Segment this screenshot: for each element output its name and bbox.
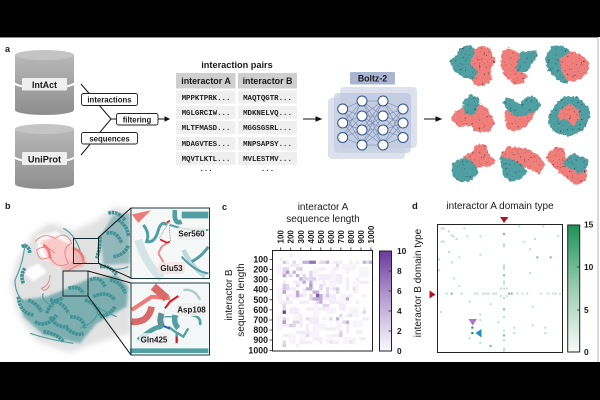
structure 1 — [452, 47, 493, 83]
label: Ser560: Ser560 — [178, 230, 205, 238]
interaction pairs table: interactor A — [181, 76, 231, 86]
Boltz-2 neural network — [328, 72, 417, 159]
inset: Asp108 Gln425 — [130, 283, 210, 355]
arrow to Boltz-2 — [303, 117, 321, 121]
label: Glu53: Glu53 — [160, 264, 183, 273]
structure 9 — [548, 149, 587, 183]
heatmap y-axis labels: 400 — [253, 285, 268, 295]
heatmap x-axis labels: 300 — [297, 230, 306, 244]
marker: red top — [500, 217, 508, 223]
domain map title: interactor A domain type — [446, 201, 554, 212]
structure 2 — [503, 50, 535, 82]
heatmap y-axis labels: 1000 — [248, 346, 268, 356]
arrow to table — [158, 117, 169, 121]
label: Asp108: Asp108 — [177, 306, 206, 314]
heatmap x-axis labels: 1000 — [367, 225, 376, 244]
heatmap x-axis labels: 100 — [277, 230, 286, 244]
label: sequences — [82, 132, 138, 144]
heatmap title — [286, 202, 360, 225]
structure 6 — [550, 99, 588, 134]
interaction pairs table: MQVTLKTL... — [182, 156, 230, 164]
heatmap colorbar: 4 — [397, 306, 402, 316]
heatmap colorbar: 6 — [397, 286, 402, 296]
domain colorbar: 10 — [584, 262, 594, 272]
heatmap x-axis labels: 700 — [337, 230, 346, 244]
label: filtering — [116, 114, 158, 125]
structure 3 — [547, 47, 587, 82]
heatmap y-axis labels: 100 — [253, 254, 268, 264]
interaction pairs table: MDKNELVQ... — [243, 110, 292, 118]
panel c label: c — [222, 202, 227, 212]
domain colorbar: 0 — [584, 347, 589, 357]
heatmap colorbar: 0 — [397, 346, 402, 356]
interaction pairs table — [176, 60, 297, 174]
heatmap y-axis labels: 300 — [253, 275, 268, 285]
connector lines — [81, 84, 117, 155]
molecular surface — [11, 207, 132, 353]
panel a label: a — [5, 44, 11, 54]
heatmap x-axis labels: 400 — [307, 230, 316, 244]
heatmap y-axis title — [224, 263, 247, 337]
interaction pairs table: MDAGVTES... — [182, 141, 230, 149]
structure 4 — [453, 97, 493, 130]
heatmap colorbar: 2 — [397, 326, 402, 336]
interaction pairs table: ... — [261, 166, 274, 174]
predicted complex structures — [452, 47, 588, 183]
database: UniProt: UniProt — [28, 154, 61, 164]
heatmap: domain type — [438, 224, 562, 352]
heatmap: sequence length — [270, 248, 372, 351]
table title: interaction pairs — [201, 60, 273, 70]
database: UniProt — [15, 124, 74, 189]
heatmap y-axis labels: 900 — [253, 335, 268, 345]
heatmap y-axis labels: 200 — [253, 264, 268, 274]
zoom box 1 — [74, 238, 98, 264]
heatmap y-axis title: sequence length — [236, 263, 247, 337]
heatmap title: sequence length — [286, 214, 360, 225]
protein complex cartoon — [11, 207, 132, 353]
domain colorbar: 15 — [584, 220, 594, 230]
label: interactions — [82, 94, 138, 106]
marker: red left — [430, 290, 436, 298]
heatmap x-axis labels: 500 — [317, 230, 326, 244]
marker: purple — [468, 319, 477, 326]
interaction pairs table: interactor B — [243, 76, 292, 86]
heatmap y-axis title: interactor B — [224, 269, 235, 321]
interaction pairs table: MPPKTPRK... — [182, 95, 230, 103]
heatmap y-axis labels: 800 — [253, 325, 268, 335]
inset: Ser560 Glu53 — [131, 208, 210, 278]
heatmap x-axis labels: 900 — [357, 230, 366, 244]
label: interactions: interactions — [87, 96, 132, 104]
panel b label: b — [5, 201, 11, 211]
structure 7 — [454, 147, 493, 180]
heatmap x-axis labels: 600 — [327, 230, 336, 244]
heatmap colorbar — [380, 246, 407, 356]
heatmap colorbar: 8 — [397, 266, 402, 276]
label: Gln425: Gln425 — [141, 336, 168, 344]
marker: blue — [476, 329, 482, 338]
structure 8 — [502, 149, 543, 180]
coral chain — [35, 235, 87, 290]
heatmap y-axis labels: 600 — [253, 305, 268, 315]
heatmap x-axis labels: 800 — [347, 230, 356, 244]
domain colorbar — [568, 220, 594, 357]
zoom lines — [88, 208, 131, 355]
heatmap x-axis labels: 200 — [287, 230, 296, 244]
domain colorbar: 5 — [584, 305, 589, 315]
panel d label: d — [412, 201, 418, 212]
structure 5 — [504, 99, 539, 130]
interaction pairs table: MVLESTMV... — [243, 156, 292, 164]
domain map y-axis title: interactor B domain type — [413, 228, 424, 337]
label: sequences: sequences — [89, 134, 130, 144]
interaction pairs table: MGLGRCIW... — [182, 110, 230, 118]
interaction pairs table: MAQTQGTR... — [243, 95, 292, 103]
teal helices — [15, 212, 128, 343]
interaction pairs table: MNPSAPSY... — [243, 141, 292, 149]
zoom box 2 — [63, 271, 88, 296]
Boltz-2 title: Boltz-2 — [358, 74, 387, 84]
heatmap y-axis labels: 700 — [253, 315, 268, 325]
arrow to structures — [424, 117, 441, 121]
heatmap colorbar: 10 — [397, 246, 407, 256]
label: filtering: filtering — [123, 116, 152, 124]
database: IntAct — [15, 50, 74, 115]
heatmap title: interactor A — [298, 202, 349, 213]
heatmap y-axis labels — [248, 254, 268, 356]
heatmap y-axis labels: 500 — [253, 295, 268, 305]
heatmap x-axis labels — [277, 225, 376, 244]
database: IntAct: IntAct — [32, 80, 57, 90]
interaction pairs table: MLTFMASD... — [182, 125, 230, 133]
interaction pairs table: MGGSGSRL... — [243, 125, 292, 133]
interaction pairs table: ... — [199, 166, 213, 174]
